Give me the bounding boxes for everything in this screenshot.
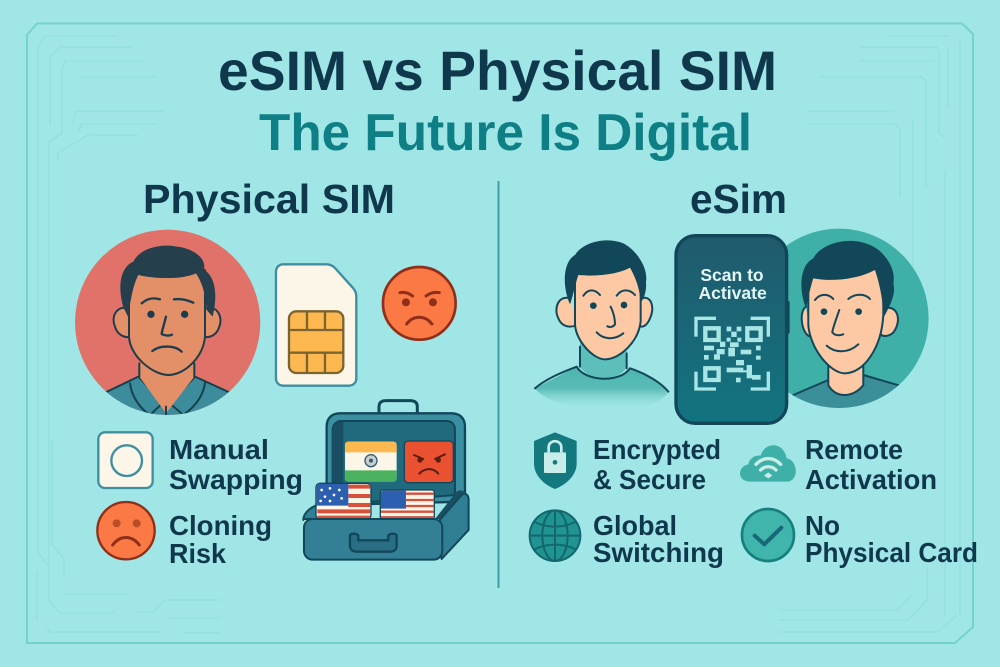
label: Manual Swapping: Manual — [169, 434, 269, 465]
flag: USA right — [380, 490, 434, 519]
label: Manual Swapping: Swapping — [169, 464, 303, 495]
illustration: man in teal circle — [786, 228, 929, 408]
icon: angry face — [383, 267, 456, 340]
icon: SIM card — [276, 264, 356, 386]
label: Global Switching — [593, 510, 724, 568]
illustration: suitcase with flag SIMs — [303, 401, 469, 560]
icon: check circle — [742, 509, 794, 561]
label: Remote Activation: Remote — [805, 434, 903, 465]
flag: USA left — [316, 483, 371, 519]
icon: angry red tile — [404, 441, 453, 483]
icon: globe — [530, 510, 580, 561]
label: No Physical Card: Physical Card — [805, 537, 978, 568]
label: Global Switching: Switching — [593, 537, 724, 568]
label: Encrypted & Secure: & Secure — [593, 464, 706, 495]
heading: eSim: eSim — [690, 176, 787, 222]
illustration: man with turtleneck — [535, 240, 668, 410]
icon: manual swapping card — [98, 432, 153, 488]
label: Cloning Risk: Risk — [169, 538, 226, 569]
QR code — [696, 318, 768, 389]
label: Cloning Risk — [169, 510, 272, 569]
illustration: phone with QR code: Activate — [698, 283, 767, 303]
label: Remote Activation — [805, 434, 937, 495]
label: No Physical Card — [805, 510, 978, 568]
label: Manual Swapping — [169, 434, 303, 495]
phone text: Scan to — [700, 265, 764, 285]
illustration: phone with QR code — [676, 236, 790, 423]
label: Global Switching: Global — [593, 510, 677, 541]
icon: cloud with wifi — [740, 445, 796, 482]
flag: India — [345, 442, 397, 482]
label: Encrypted & Secure: Encrypted — [593, 434, 721, 465]
label: Remote Activation: Activation — [805, 464, 937, 495]
label: No Physical Card: No — [805, 510, 840, 541]
label: Cloning Risk: Cloning — [169, 510, 272, 541]
center divider — [498, 181, 500, 588]
icon: sad face — [97, 502, 155, 559]
icon: shield with lock — [534, 432, 577, 489]
subtitle: The Future Is Digital — [259, 104, 752, 162]
label: Encrypted & Secure — [593, 434, 721, 495]
illustration: worried man in red circle — [75, 230, 260, 420]
title: eSIM vs Physical SIM — [218, 39, 777, 102]
heading: Physical SIM: Physical SIM — [143, 176, 395, 222]
